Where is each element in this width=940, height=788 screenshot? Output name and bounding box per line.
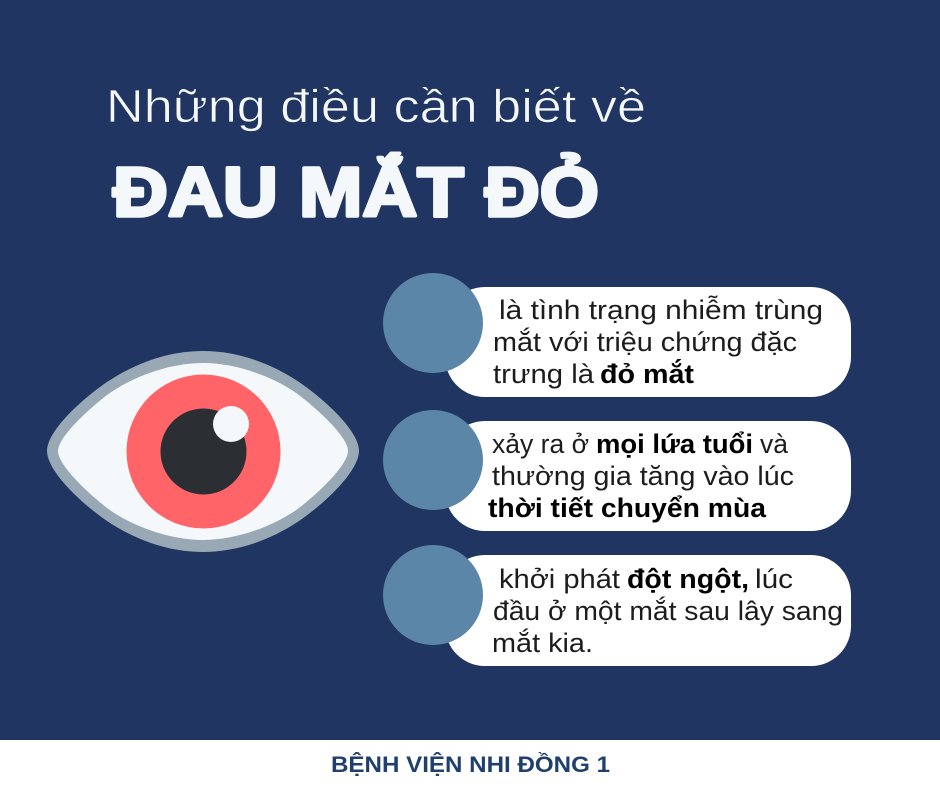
title: intro line: Những điều cần biết về <box>106 80 646 132</box>
panel: who and when: xảy ra ở <box>492 429 589 459</box>
panel: definition: mắt với triệu chứng đặc <box>493 326 797 357</box>
panel: definition <box>383 273 851 397</box>
panel: onset: đầu ở một mắt sau lây sang <box>493 595 843 626</box>
footer text: BỆNH VIỆN NHI ĐỒNG 1 <box>331 752 610 777</box>
panel: who and when: thời tiết chuyển mùa <box>488 493 767 523</box>
panel: who and when: thường gia tăng vào lúc <box>492 461 794 491</box>
panel: who and when: mọi lứa tuổi <box>596 429 753 459</box>
panel: onset: mắt kia. <box>492 627 593 658</box>
panel: onset <box>383 545 851 666</box>
panel: definition: là tình trạng nhiễm trùng <box>499 294 823 325</box>
panel: onset: đột ngột, <box>627 564 749 594</box>
icon: red eye <box>47 351 359 552</box>
panel: who and when <box>383 410 851 531</box>
panel: definition: trưng là <box>493 359 595 389</box>
panel: who and when: và <box>760 429 789 459</box>
panel: definition: đỏ mắt <box>600 358 694 389</box>
footer band <box>0 740 940 788</box>
panel: onset: khởi phát <box>499 564 621 594</box>
title: main heading: ĐAU MẮT ĐỎ <box>113 152 599 231</box>
panel: onset: lúc <box>755 564 793 594</box>
